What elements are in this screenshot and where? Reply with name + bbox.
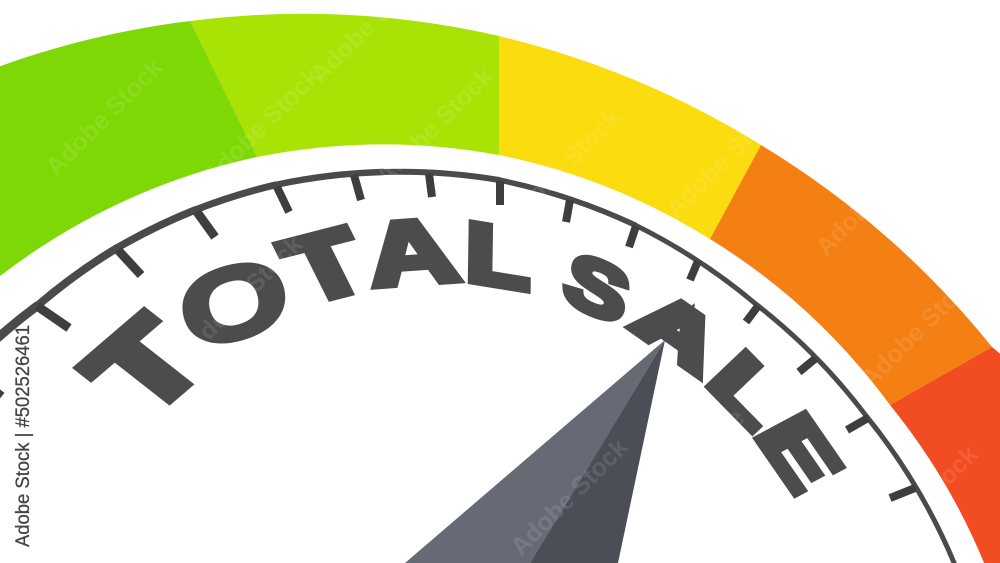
stock watermarks: Adobe Stock <box>370 62 498 190</box>
segment: yellow <box>499 36 761 239</box>
stock watermarks: Adobe Stock <box>675 350 803 478</box>
stock watermarks: Adobe Stock <box>810 133 938 261</box>
letter A: A <box>622 274 733 389</box>
stock watermarks: Adobe Stock <box>197 62 325 190</box>
needle light face <box>405 340 665 563</box>
letter T: T <box>59 297 231 435</box>
letter E: E <box>739 400 860 504</box>
needle dark face <box>530 340 665 563</box>
letter O: O <box>168 233 300 372</box>
letter A: A <box>356 200 466 306</box>
stock watermarks: Adobe Stock <box>498 103 626 231</box>
segment: red <box>890 347 1000 563</box>
letter S: S <box>556 236 638 341</box>
stock watermarks: Adobe Stock <box>855 265 983 393</box>
dial ring <box>0 172 957 563</box>
stock watermarks: Adobe Stock <box>505 433 633 561</box>
segment: orange <box>710 145 992 405</box>
letter T: T <box>268 210 384 322</box>
segment: green <box>0 21 257 280</box>
stock watermarks: Adobe Stock <box>40 53 168 181</box>
title: TOTAL SALE curved lettering <box>59 200 860 504</box>
letter L: L <box>465 205 530 308</box>
vertical stock credit: Adobe Stock | #502526461 <box>13 325 34 547</box>
segment: lime <box>190 14 499 157</box>
letter L: L <box>693 336 803 444</box>
stock watermarks: Adobe Stock <box>660 95 788 223</box>
stock watermarks: Adobe Stock <box>180 230 308 358</box>
needle <box>405 340 665 563</box>
dial ticks <box>0 174 915 498</box>
